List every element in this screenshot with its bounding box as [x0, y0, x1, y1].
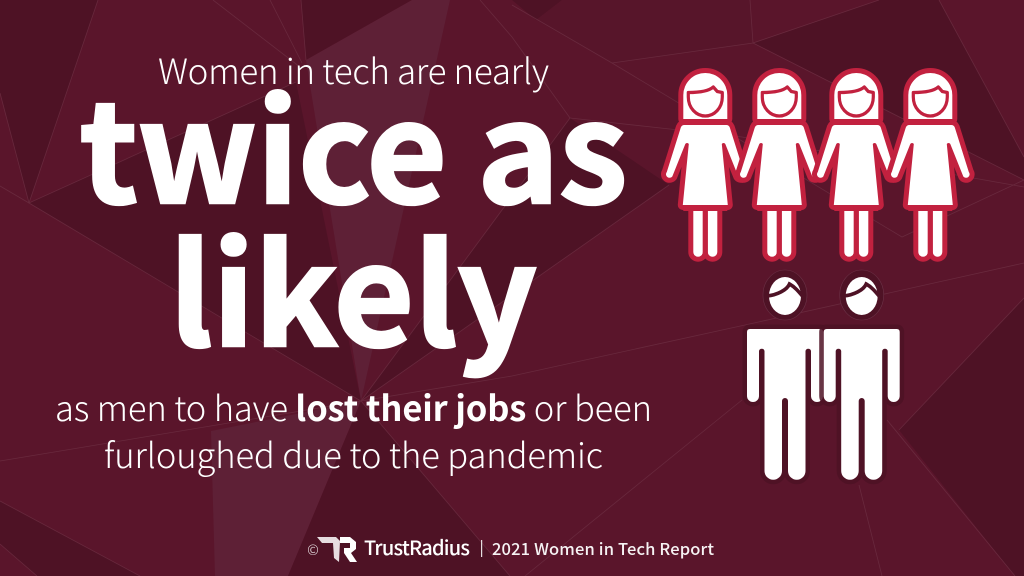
icon: man 1 — [747, 270, 823, 480]
copyright symbol: © — [307, 540, 319, 560]
icon: woman 2 — [740, 73, 819, 257]
heading: likely: likely — [169, 186, 537, 387]
text block: second line: furloughed due to the pandemic — [104, 428, 603, 478]
icon: woman 4 — [891, 73, 970, 257]
icon: TrustRadius logo mark — [317, 537, 357, 562]
brand name: TrustRadius — [364, 532, 470, 561]
report title: 2021 Women in Tech Report — [492, 536, 714, 560]
heading: twice as: twice as — [80, 43, 628, 244]
separator — [481, 540, 482, 557]
footer — [307, 532, 714, 562]
icon group: four women — [666, 73, 970, 257]
icon: man 2 — [824, 270, 900, 480]
icon group: two men — [747, 270, 900, 480]
icon: woman 1 — [666, 73, 745, 257]
heading: lead-in line: Women in tech are nearly — [158, 44, 549, 95]
text block: first line: as men to have lost their jobs or been — [55, 381, 652, 431]
icon: woman 3 — [817, 73, 896, 257]
